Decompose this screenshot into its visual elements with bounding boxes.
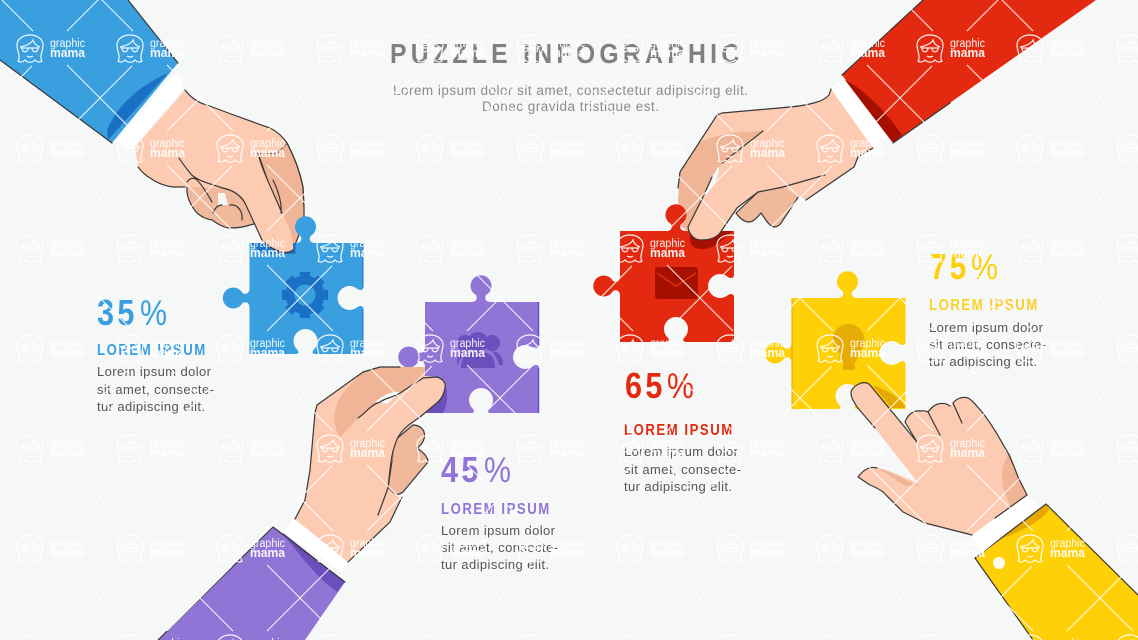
yellow hand outlines (851, 383, 1027, 535)
text block: 45%: Lorem ipsum dolor (441, 523, 556, 538)
blue hand thumb shade (258, 143, 304, 250)
text block: 65%: Lorem ipsum dolor (624, 444, 739, 459)
text block: 75%: % (971, 248, 998, 287)
blue hand palm and index finger (135, 90, 293, 252)
blue puzzle piece (223, 216, 364, 354)
red sleeve (842, 0, 1096, 143)
blue shirt cuff (116, 72, 184, 149)
subtitle (393, 83, 748, 114)
blue hand outlines (138, 90, 304, 252)
blue hand curled fingers (187, 180, 258, 228)
purple sleeve (158, 527, 345, 640)
red hand palm and index finger (688, 89, 873, 240)
text block: 75%: Lorem ipsum dolor (929, 320, 1044, 335)
yellow hand (851, 383, 1027, 535)
text block: 65%: tur adipiscing elit. (624, 479, 732, 494)
yellow sleeve (975, 504, 1138, 640)
title: PUZZLE INFOGRAPHIC (390, 38, 739, 69)
text block: 75%: LOREM IPSUM (929, 297, 1039, 314)
text block: 35%: Lorem ipsum dolor (97, 364, 212, 379)
panel: yellow hand and puzzle piece (765, 271, 1138, 640)
blue sleeve (0, 0, 178, 143)
text block: 45%: LOREM IPSUM (441, 501, 551, 518)
icon: gear (282, 272, 328, 318)
text block: 65% (624, 367, 741, 494)
text block: 35%: 35 (97, 294, 138, 334)
yellow hand shades (877, 453, 1027, 507)
text block: 35%: sit amet, consecte- (97, 382, 214, 397)
purple puzzle piece (398, 275, 539, 413)
text block: 75%: sit amet, consecte- (929, 337, 1046, 352)
text block: 45%: tur adipiscing elit. (441, 557, 549, 572)
red hand outlines (678, 89, 873, 240)
text block: 75%: 75 (930, 246, 969, 287)
text block: 45%: sit amet, consecte- (441, 540, 558, 555)
text block: 65%: % (667, 367, 694, 406)
sleeve button (993, 557, 1005, 569)
text block: 65%: LOREM IPSUM (624, 422, 734, 439)
icon: light bulb (832, 324, 864, 370)
blue hand finger gap (218, 193, 228, 205)
purple hand gap sliver (375, 392, 400, 404)
text block: 45%: % (484, 451, 511, 490)
purple hand palm (295, 367, 445, 562)
panel: purple hand and puzzle piece (158, 275, 539, 640)
purple hand curled fingers (388, 425, 428, 494)
red hand gap sliver (703, 166, 719, 197)
red hand curled fingers (736, 183, 810, 227)
red hand thumb shade (678, 131, 763, 232)
icon: people (457, 332, 503, 368)
red shirt cuff (831, 78, 888, 148)
text block: 35%: tur adipiscing elit. (97, 399, 205, 414)
panel: blue hand and puzzle piece (0, 0, 364, 354)
text block: 35% (97, 294, 214, 414)
yellow shirt cuff (972, 496, 1039, 553)
text block: 75%: tur adipiscing elit. (929, 354, 1037, 369)
panel: red hand and puzzle piece (593, 0, 1096, 342)
text block: 45% (441, 451, 558, 572)
purple hand thumb shade (334, 367, 425, 437)
text block: 65%: sit amet, consecte- (624, 462, 741, 477)
purple hand outlines (295, 367, 445, 562)
subtitle: Donec gravida tristique est. (482, 99, 659, 114)
text block: 35%: % (140, 294, 167, 333)
yellow puzzle piece (765, 271, 906, 409)
text block: 35%: LOREM IPSUM (97, 342, 207, 359)
text block: 45%: 45 (441, 451, 482, 491)
subtitle: Lorem ipsum dolor sit amet, consectetur adipiscing elit. (393, 83, 748, 98)
icon: envelope (655, 267, 698, 299)
text block: 75% (929, 246, 1046, 369)
purple shirt cuff (283, 519, 348, 572)
red puzzle piece (593, 204, 734, 342)
text block: 65%: 65 (625, 367, 666, 407)
